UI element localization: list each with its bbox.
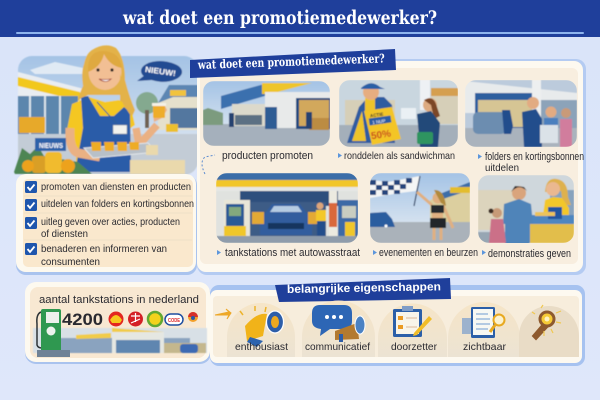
speech bubble: nieuws: NIEUW! xyxy=(144,65,176,78)
ribbon xyxy=(275,278,451,302)
header banner xyxy=(0,0,600,37)
item 4 xyxy=(25,243,167,268)
jars, oranges and sign: NIEUWS xyxy=(39,141,63,150)
scene: demonstrations xyxy=(478,175,574,244)
caption: evenementen en beurzen xyxy=(379,247,478,259)
brand logos xyxy=(108,312,198,326)
caption: uitdelen xyxy=(485,162,519,174)
scene: sandwichman: 1 NUP xyxy=(372,118,386,125)
item 3: uitleg geven over acties, producten xyxy=(41,216,180,228)
path arrow xyxy=(202,155,215,174)
panel: activities xyxy=(190,49,586,275)
jars, oranges and sign xyxy=(14,138,185,174)
trait: enthousiast: enthousiast xyxy=(235,341,288,353)
trait: enthousiast xyxy=(227,303,295,357)
item 1: promoten van diensten en producten xyxy=(41,181,191,193)
panel: task checklist xyxy=(16,174,197,275)
caption xyxy=(478,151,584,174)
trait: communicatief xyxy=(302,300,375,357)
scene: producten promoten xyxy=(203,81,330,146)
trait: zichtbaar xyxy=(448,302,520,357)
panel: key properties xyxy=(210,278,585,366)
icon: fuel pump xyxy=(37,309,70,357)
title: wat doet een promotiemedewerker? xyxy=(122,7,437,29)
caption: producten promoten xyxy=(222,150,313,162)
trait: zichtbaar: zichtbaar xyxy=(463,341,507,353)
panel: promotional worker illustration xyxy=(14,45,198,175)
woman with tray xyxy=(65,45,167,172)
ribbon: wat doet een promotiemedewerker? xyxy=(197,51,385,72)
caption: demonstraties geven xyxy=(488,248,571,260)
station strip xyxy=(33,328,207,353)
scene: sandwichman: 50% xyxy=(370,129,392,142)
heading: aantal tankstations in nederland xyxy=(39,294,199,306)
item 4: benaderen en informeren van xyxy=(41,243,167,255)
number: 4200 xyxy=(62,311,103,329)
trait: doorzetter xyxy=(378,304,447,357)
scene: sandwichman: ACTIE xyxy=(370,112,384,118)
item 2: uitdelen van folders en kortingsbonnen xyxy=(41,198,194,210)
arrow xyxy=(215,309,231,319)
panel: number of stations xyxy=(25,282,211,364)
ribbon: belangrijke eigenschappen xyxy=(287,281,441,296)
item 4: consumenten xyxy=(41,256,100,268)
speech bubble: nieuws xyxy=(137,61,182,82)
ribbon xyxy=(190,49,396,78)
trait: doorzetter: doorzetter xyxy=(391,341,437,353)
scene: car wash xyxy=(216,173,358,243)
trait: communicatief: communicatief xyxy=(305,341,370,353)
caption: tankstations met autowasstraat xyxy=(225,247,360,259)
scene: events xyxy=(370,173,470,243)
brand logos: CODE xyxy=(168,318,180,324)
scene: folders xyxy=(465,80,577,147)
caption: ronddelen als sandwichman xyxy=(344,150,455,162)
item 3 xyxy=(25,216,180,240)
trait: flashlight icon xyxy=(519,305,579,357)
scene: sandwichman xyxy=(339,80,458,147)
item 3: of diensten xyxy=(41,228,88,240)
